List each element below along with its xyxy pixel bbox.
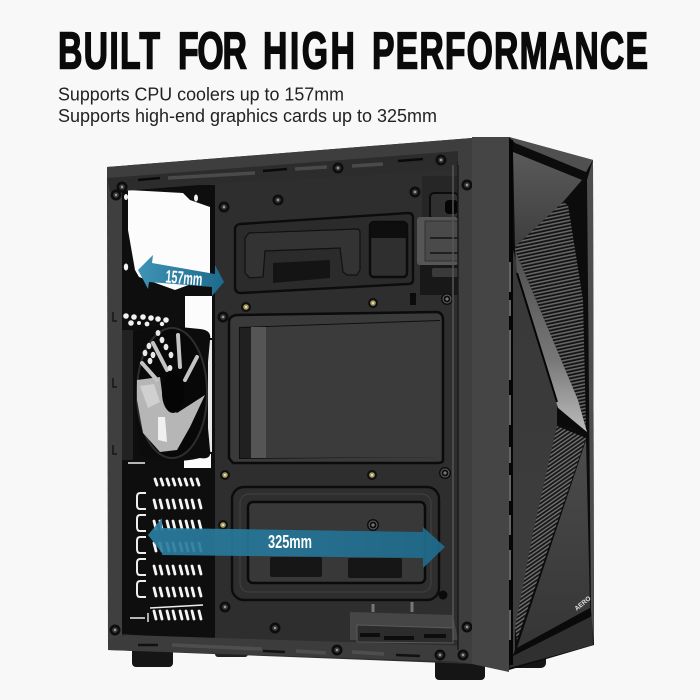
title: FOR [178, 22, 247, 80]
facet: left dark [513, 250, 557, 655]
white opening: lower [184, 454, 211, 468]
slot row 2 [154, 500, 201, 508]
slot row 7 [154, 611, 201, 619]
top flange [107, 138, 472, 200]
rear panel [122, 185, 215, 640]
case body frame [107, 138, 472, 664]
ventilation holes [123, 194, 198, 326]
left rail [108, 177, 122, 640]
label: 157mm: 157mm [165, 266, 203, 290]
slot: right [348, 558, 402, 578]
fan lower blades [137, 377, 205, 452]
upper cutout [235, 213, 413, 293]
mesh: lower [515, 426, 586, 640]
motherboard tray [210, 168, 458, 648]
label: 325mm: 325mm [268, 532, 312, 552]
brand logo: AERO [574, 595, 592, 613]
white opening: upper [128, 190, 210, 290]
slot row 3 [154, 521, 201, 529]
slot row 5 [154, 566, 201, 574]
slot row 1 [155, 479, 199, 485]
title: PERFORMANCE [372, 22, 648, 80]
seam strip [509, 140, 513, 665]
bottom flange [108, 624, 470, 662]
arrow: 325mm graphics card clearance [148, 518, 445, 568]
text: graphics card support: Supports high-end graphics cards up to 325mm [58, 106, 437, 126]
front edge panel [472, 137, 509, 672]
facet: upper grey [513, 152, 582, 247]
fan upper blades [142, 335, 197, 380]
expansion slots [154, 479, 201, 619]
standoffs and screws [218, 186, 453, 634]
title [58, 22, 648, 80]
lower cutout [232, 487, 439, 600]
facet: lower right [517, 440, 590, 648]
inner right rail [453, 148, 472, 664]
grey strip [122, 330, 133, 460]
top-right drive bracket [417, 176, 458, 295]
case fan [134, 326, 210, 461]
text: CPU cooler support: Supports CPU coolers up to 157mm [58, 84, 344, 104]
facet: upper right black [563, 180, 586, 430]
mesh: upper [515, 202, 586, 428]
facet: light band [515, 250, 587, 432]
arrow: 157mm CPU cooler clearance [138, 255, 224, 296]
PC case [107, 137, 594, 680]
slot row 6 [154, 588, 201, 596]
feature text [58, 84, 437, 126]
facet: bottom dark band [513, 608, 592, 656]
fan hub [162, 373, 184, 413]
facet: top chamfer [509, 137, 593, 172]
right edge strip [587, 160, 594, 645]
white opening: middle [185, 296, 212, 338]
slot cover clips [128, 463, 203, 622]
facet: bottom grey [509, 616, 593, 668]
slot: left [270, 557, 322, 577]
title: HIGH [263, 22, 355, 80]
slot row 4 [154, 543, 201, 551]
CPU cutout [229, 312, 443, 463]
fan perforations [143, 330, 173, 371]
side of front panel [509, 137, 594, 670]
case feet [132, 646, 546, 680]
front face base [509, 137, 594, 670]
bottom drive cage [350, 602, 458, 643]
title: BUILT [58, 22, 160, 80]
